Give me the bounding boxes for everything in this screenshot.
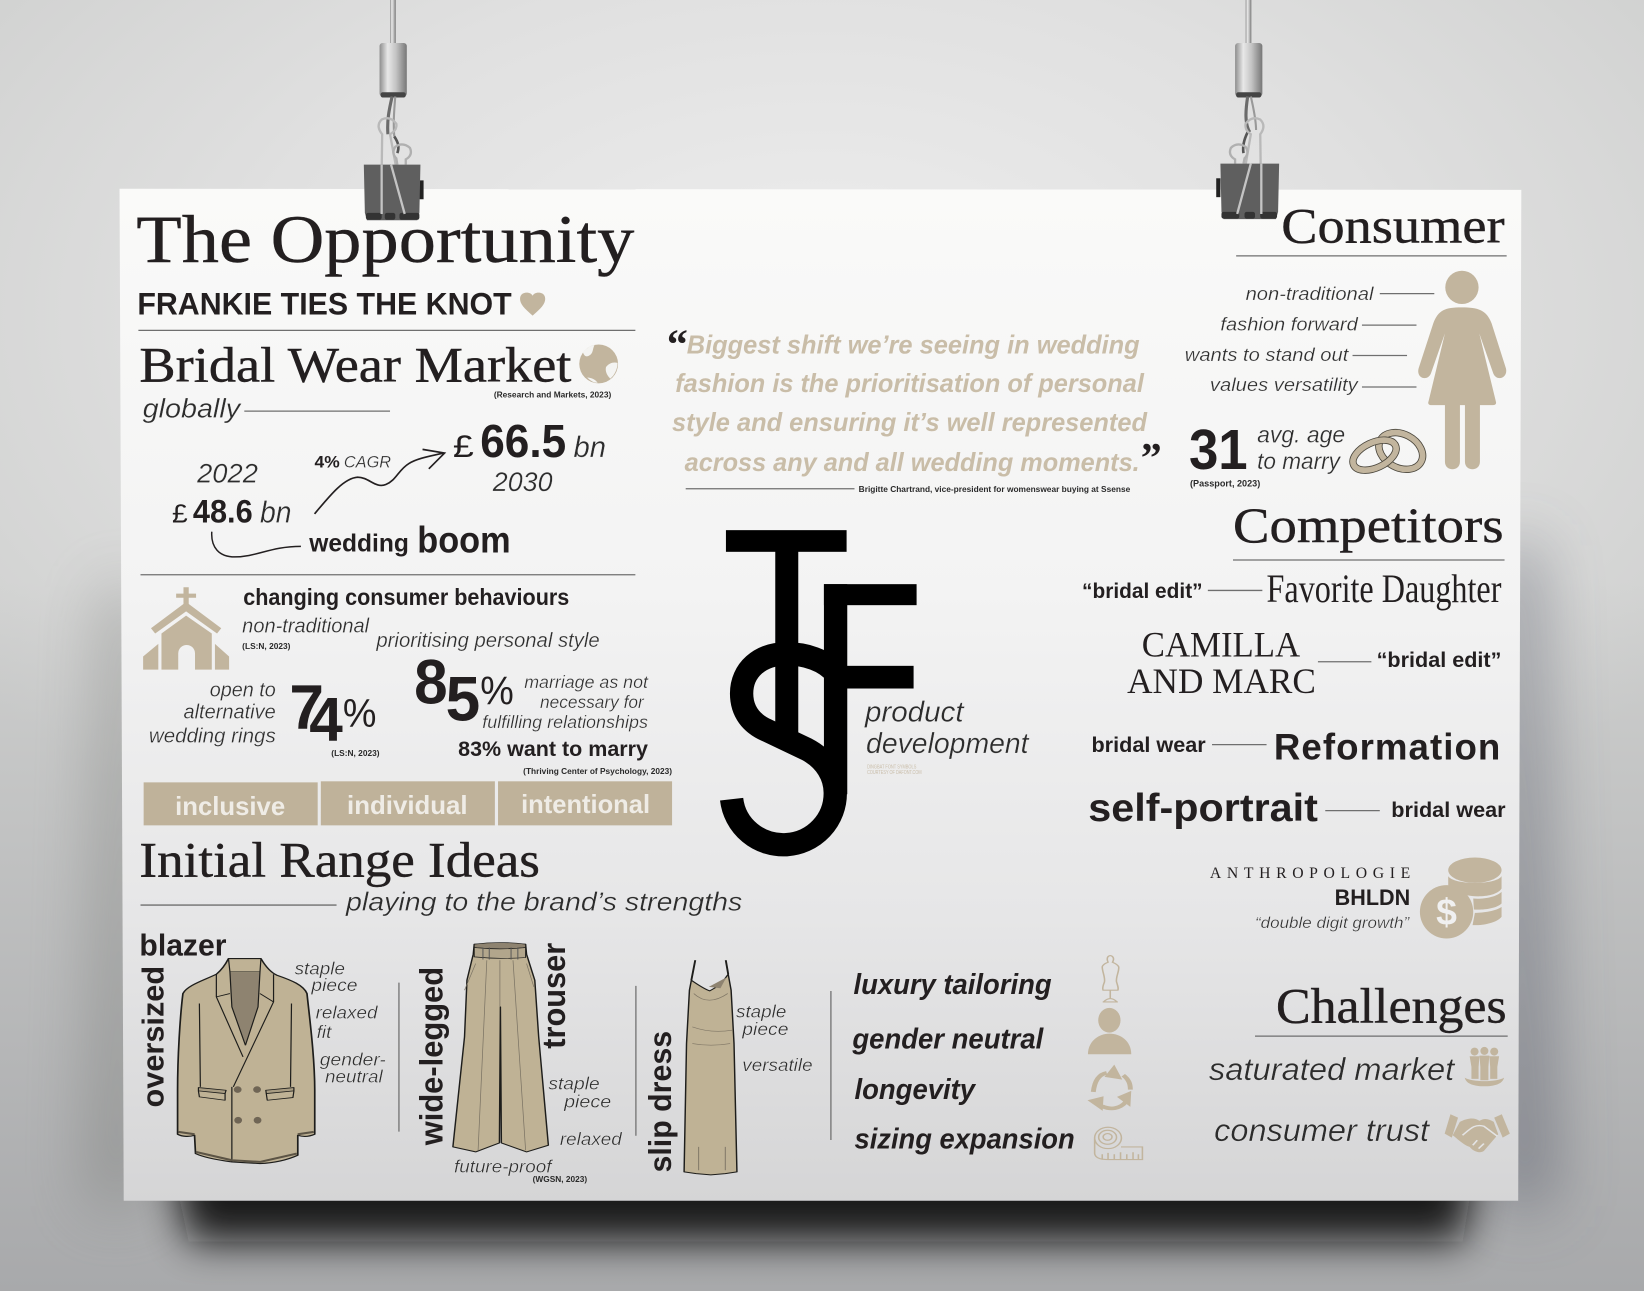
panel: consumer — [1185, 198, 1507, 489]
trouser notes: piece — [563, 1091, 611, 1111]
stat: average age: avg. age — [1257, 422, 1345, 448]
quote text: fashion is the prioritisation of personal — [675, 368, 1145, 398]
CAGR label — [315, 453, 391, 472]
heading: Competitors — [1233, 498, 1504, 553]
panel: challenges — [1209, 979, 1508, 1148]
panel: changing consumer behaviours — [143, 584, 672, 776]
fine print: DINGBAT FONT SYMBOLS — [867, 765, 917, 771]
garment: blazer: blazer — [139, 928, 227, 962]
value tags: individual — [347, 790, 468, 820]
dress notes — [736, 1001, 813, 1075]
source: (Thriving Center of Psychology, 2023) — [523, 766, 672, 776]
stat: 74%: % — [343, 692, 376, 736]
competitor: self-portrait: self-portrait — [1088, 787, 1318, 830]
product development label: product — [864, 696, 965, 728]
trouser notes: future-proof — [454, 1156, 554, 1176]
prioritising personal style: prioritising personal style — [375, 630, 600, 652]
trouser notes — [454, 1074, 623, 1184]
trouser notes: (WGSN, 2023) — [533, 1175, 588, 1184]
source: (LS:N, 2023) — [242, 642, 291, 651]
competitor: Reformation — [1091, 726, 1500, 767]
product development label: COURTESY OF DAFONT.COM — [867, 770, 922, 776]
stat: 2030 value: bn — [574, 431, 606, 464]
strengths list — [851, 968, 1075, 1154]
arrow: connector to wedding boom — [212, 532, 301, 557]
heading: Consumer — [1281, 198, 1505, 253]
garment: slip dress: slip dress — [643, 1031, 678, 1172]
icon: measuring tape — [1095, 1127, 1142, 1160]
trouser notes: relaxed — [560, 1129, 623, 1149]
heading: Bridal Wear Market — [139, 338, 572, 393]
garment: trouser: trouser — [536, 942, 572, 1049]
strengths list: sizing expansion — [855, 1122, 1075, 1154]
icon: recycle — [1087, 1065, 1131, 1111]
quote text: Biggest shift we’re seeing in wedding — [687, 329, 1140, 359]
stat: 74%: 4 — [309, 685, 343, 754]
icon: coins — [1420, 857, 1502, 938]
competitor: Camilla and Marc: AND MARC — [1127, 661, 1316, 701]
quote text — [672, 329, 1148, 477]
consumer traits: values versatility — [1210, 374, 1359, 395]
stat: 2030 value: 2030 — [492, 466, 553, 497]
stat: 85% — [414, 648, 514, 734]
competitor: Favorite Daughter: Favorite Daughter — [1267, 566, 1501, 611]
stat: 2030 value — [453, 415, 606, 497]
wedding boom: boom — [417, 520, 511, 561]
attribution: Brigitte Chartrand, vice-president for womenswear buying at Ssense — [859, 484, 1130, 494]
blazer notes: gender- — [320, 1050, 386, 1070]
value tags: intentional — [521, 789, 650, 819]
stat: 2030 value: 66.5 — [480, 415, 566, 467]
83% want to marry: 83% want to marry — [458, 738, 648, 761]
product development label — [864, 696, 1030, 776]
opening quote mark: “ — [667, 323, 688, 369]
dress notes: piece — [741, 1019, 789, 1039]
garment: slip dress — [643, 960, 813, 1175]
alternative rings note — [149, 679, 276, 748]
closing quote mark: ” — [1141, 436, 1162, 482]
competitor: Anthropologie BHLDN: “double digit growth” — [1255, 915, 1410, 932]
strengths list: gender neutral — [851, 1023, 1044, 1055]
dress drawing — [684, 960, 737, 1175]
competitor: Reformation: bridal wear — [1091, 734, 1206, 757]
competitor: Anthropologie BHLDN: ANTHROPOLOGIE — [1210, 865, 1410, 882]
stat: average age — [1189, 418, 1345, 489]
stat: 2022 value: 2022 — [196, 457, 258, 488]
globally label: globally — [143, 392, 242, 423]
competitor: Reformation: Reformation — [1274, 726, 1500, 767]
logo: TSF monogram — [726, 530, 917, 845]
marriage note: marriage as not — [524, 672, 649, 692]
strengths icons — [1087, 956, 1510, 1160]
stat: 74%: 7 — [289, 673, 324, 743]
stat: 2030 value: £ — [453, 429, 474, 464]
icon: globe — [579, 345, 618, 383]
icon: person — [1088, 1008, 1131, 1054]
competitor: self-portrait — [1088, 787, 1506, 830]
dress notes: staple — [736, 1001, 786, 1021]
panel: bridal wear market — [139, 338, 618, 561]
CAGR label: CAGR — [344, 453, 391, 472]
competitor: Anthropologie BHLDN: BHLDN — [1335, 885, 1410, 910]
alternative rings note: alternative — [183, 701, 276, 723]
icon: woman — [1418, 271, 1506, 469]
panel: initial range ideas — [137, 198, 1510, 1184]
garment: trouser: wide-legged — [413, 967, 449, 1146]
right hanging clip — [1216, 0, 1279, 219]
quote text: style and ensuring it’s well represented — [672, 407, 1148, 437]
blazer notes: piece — [310, 975, 358, 995]
marriage note: fulfilling relationships — [482, 712, 648, 732]
icon: coins: $ — [1436, 890, 1457, 932]
stat: 2022 value: bn — [260, 495, 291, 529]
panel: competitors — [1082, 498, 1506, 938]
wedding boom — [308, 520, 511, 561]
consumer traits: wants to stand out — [1185, 344, 1349, 365]
icon: three people — [1465, 1047, 1504, 1086]
consumer traits — [1185, 283, 1434, 395]
garment: blazer — [137, 928, 386, 1164]
blazer notes: neutral — [325, 1066, 384, 1086]
icon: wedding rings — [1348, 425, 1429, 477]
title block — [136, 201, 634, 322]
wedding boom: wedding — [308, 530, 409, 558]
marriage note — [482, 672, 649, 732]
non-traditional: non-traditional — [242, 615, 370, 637]
consumer traits: fashion forward — [1220, 313, 1358, 334]
stat: 2022 value — [172, 457, 291, 529]
consumer traits: non-traditional — [1246, 283, 1374, 304]
product development label: development — [866, 727, 1030, 759]
competitor: Camilla and Marc — [1127, 625, 1501, 701]
subheading: playing to the brand’s strengths — [345, 886, 742, 916]
challenge: saturated market: saturated market — [1209, 1052, 1456, 1087]
source: (Research and Markets, 2023) — [494, 389, 611, 399]
stat: average age: (Passport, 2023) — [1190, 479, 1260, 489]
dress notes: versatile — [742, 1055, 813, 1075]
challenge: consumer trust: consumer trust — [1214, 1113, 1430, 1148]
marriage note: necessary for — [540, 692, 645, 712]
heading: Initial Range Ideas — [139, 833, 540, 888]
value tags: inclusive — [175, 791, 285, 821]
subtitle: FRANKIE TIES THE KNOT — [137, 287, 512, 322]
stat: 85%: 8 — [414, 648, 448, 718]
stat: average age: to marry — [1257, 448, 1341, 474]
stat: 2022 value: 48.6 — [193, 493, 253, 529]
panel: quote — [667, 323, 1162, 494]
value tags — [144, 781, 672, 825]
competitor: Favorite Daughter: “bridal edit” — [1082, 580, 1203, 603]
blazer drawing — [178, 959, 315, 1164]
arrow: growth curve — [315, 449, 445, 514]
trouser drawing — [453, 943, 548, 1152]
quote text: across any and all wedding moments. — [685, 447, 1140, 477]
strengths list: luxury tailoring — [853, 968, 1052, 1000]
trouser notes: staple — [548, 1074, 600, 1094]
heading: Challenges — [1276, 979, 1507, 1034]
heading: changing consumer behaviours — [243, 584, 569, 610]
poster sheet — [120, 189, 1521, 1201]
competitor: Camilla and Marc: “bridal edit” — [1377, 649, 1501, 672]
icon: mannequin — [1102, 956, 1119, 1002]
icon: heart — [520, 293, 545, 316]
source: (LS:N, 2023) — [331, 749, 380, 758]
stat: average age: 31 — [1189, 418, 1248, 481]
garment: trouser — [413, 942, 623, 1184]
blazer notes: staple — [295, 958, 345, 978]
blazer notes: fit — [317, 1022, 332, 1042]
stat: 74% — [289, 673, 376, 754]
strengths list: longevity — [855, 1073, 976, 1105]
icon: handshake — [1445, 1114, 1510, 1152]
left hanging clip — [364, 0, 424, 220]
stat: 2022 value: £ — [172, 498, 188, 528]
blazer notes — [295, 958, 386, 1086]
competitor: Favorite Daughter — [1082, 566, 1501, 611]
stat: 85%: 5 — [446, 664, 480, 734]
alternative rings note: open to — [210, 679, 276, 701]
garment: blazer: oversized — [137, 966, 171, 1107]
title: The Opportunity — [136, 201, 634, 277]
blazer notes: relaxed — [316, 1002, 379, 1022]
competitor: self-portrait: bridal wear — [1391, 799, 1506, 822]
icon: church — [143, 587, 229, 670]
stat: 85%: % — [480, 670, 514, 714]
alternative rings note: wedding rings — [149, 726, 276, 748]
CAGR label: 4% — [315, 453, 340, 472]
competitor: Camilla and Marc: CAMILLA — [1142, 625, 1300, 665]
competitor: Anthropologie BHLDN — [1210, 865, 1410, 932]
